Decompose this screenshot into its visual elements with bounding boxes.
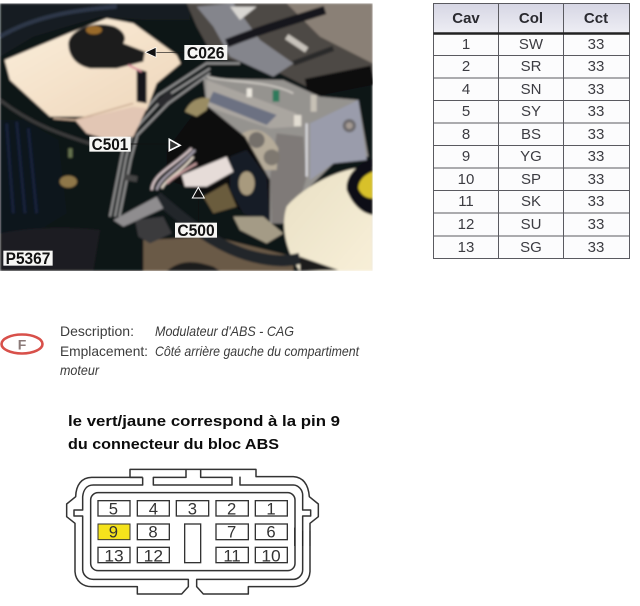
table header: Col [519,10,543,27]
pin numbers: 2 [227,499,236,518]
pin numbers: 12 [144,546,163,565]
pin numbers [104,499,281,565]
table header: Cav [452,10,480,27]
pin numbers: 11 [223,546,241,565]
ABS block [203,78,368,223]
label: C501 callout [89,136,182,152]
table rows: 33 [588,126,604,143]
description text block: Modulateur d'ABS - CAG [155,323,294,339]
pin numbers: 6 [266,523,276,542]
table rows: 11 [458,193,474,210]
table rows: 2 [462,58,470,75]
black hose lower [157,197,300,261]
table rows: 33 [588,171,604,188]
table rows: 9 [462,148,470,165]
table rows: YG [520,148,542,165]
pin numbers: 10 [261,546,281,565]
table rows: 33 [588,216,604,233]
left hose [2,122,42,232]
label: C026 callout [144,45,228,60]
table rows: 13 [458,239,474,256]
table rows: 1 [462,36,470,53]
table rows: 33 [588,148,604,165]
pin numbers: 8 [148,523,158,542]
label: C500 callout [175,187,217,240]
table rows: SY [521,103,541,120]
photo: ABS modulator in engine bay [0,3,373,271]
wires [152,148,197,190]
label: C500 callout: C500 [177,221,215,240]
table rows: 33 [588,239,604,256]
table rows: 8 [462,126,470,143]
table rows: 33 [588,81,604,98]
table header: Cct [584,10,608,27]
pin numbers: 9 [109,523,118,542]
brake pipes [110,63,240,217]
connector housing outline [67,469,318,594]
right reservoir [284,167,373,271]
table rows: 33 [588,58,604,75]
label: C501 callout: C501 [92,135,128,154]
annotation: pin 9 note [68,413,340,453]
table rows: SG [520,239,542,256]
table header [434,4,630,34]
table rows: SP [521,171,541,188]
table rows: 33 [588,193,604,210]
table rows [458,36,604,256]
table rows: 33 [588,36,604,53]
pin numbers: 5 [109,499,118,518]
table rows: 33 [588,103,604,120]
annotation: pin 9 note: du connecteur du bloc ABS [68,436,279,453]
table rows: BS [521,126,541,143]
label: P5367 photo reference: P5367 [6,249,50,268]
table rows: SW [519,36,544,53]
table rows: SU [521,216,541,233]
table rows: SR [521,58,542,75]
description text block: Côté arrière gauche du compartiment [155,343,360,359]
description text block: Description: [60,323,134,339]
description text block: Emplacement: [60,343,148,359]
table rows: SN [521,81,541,98]
pin numbers: 13 [104,546,124,565]
pin numbers: 1 [266,499,276,518]
pin 9 highlighted [98,524,130,540]
pin numbers: 4 [149,499,158,518]
table rows: 10 [458,171,474,188]
table rows: 12 [458,216,474,233]
bottom tan [143,237,293,271]
pin numbers: 3 [188,499,197,518]
inner dark recess [166,106,268,211]
label: C026 callout: C026 [187,43,224,62]
brake reservoir [5,18,181,117]
table: cavity, colour, circuit [434,4,630,258]
icon: France oval badge: F [18,336,27,352]
table rows: 5 [462,103,470,120]
connector diagram: ABS block pinout [67,469,318,594]
table rows: 4 [462,81,470,98]
description text block: moteur [60,362,100,378]
pin slots [98,501,287,563]
table rows: SK [521,193,541,210]
reservoir cap [68,24,145,68]
description text block [60,323,360,378]
icon: France oval badge [2,334,42,354]
annotation: pin 9 note: le vert/jaune correspond à la pin 9 [68,413,340,430]
pin numbers: 7 [227,523,236,542]
